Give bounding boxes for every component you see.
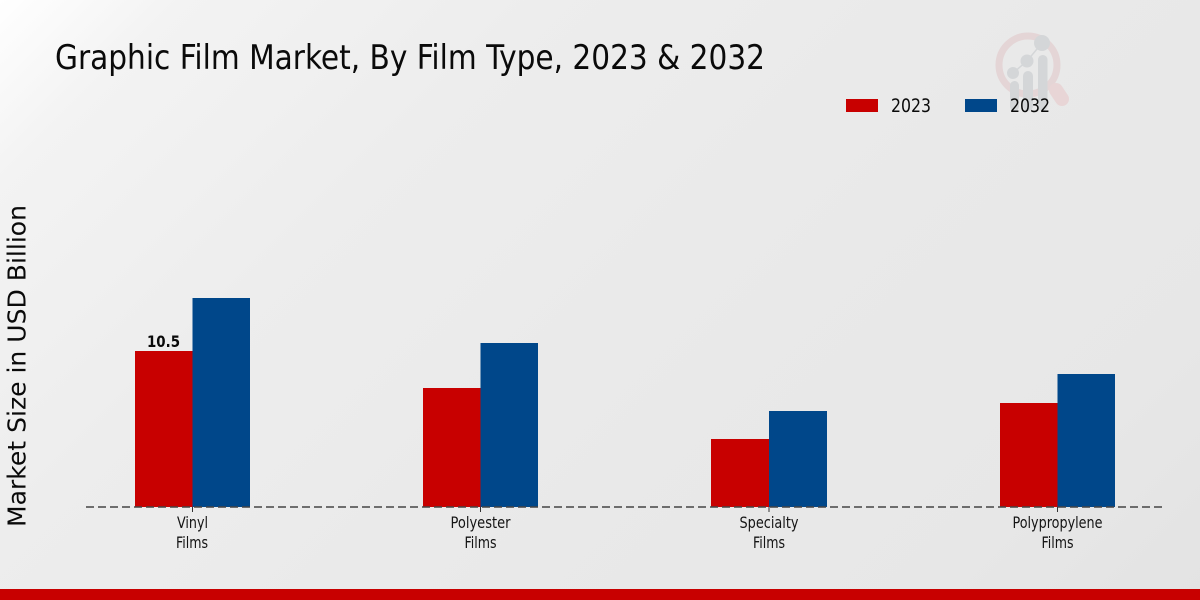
data label: 10.5: 10.5: [147, 332, 180, 351]
group: Vinyl Films: Films: [176, 533, 208, 552]
group: Polypropylene Films: [1000, 374, 1115, 552]
group: Polypropylene Films: Films: [1042, 533, 1074, 552]
group: Specialty Films: Films: [753, 533, 785, 552]
legend item: 2032: [965, 95, 1050, 117]
bottom bar: [0, 589, 1200, 600]
legend: [846, 95, 1050, 117]
group: Specialty Films: Specialty: [740, 513, 799, 532]
group: Polyester Films: [423, 343, 538, 552]
y axis label: Market Size in USD Billion: [2, 205, 32, 527]
group: Polyester Films: Films: [464, 533, 496, 552]
group: Polyester Films: Polyester: [450, 513, 511, 532]
group: Vinyl Films: Vinyl: [177, 513, 208, 532]
bar chart: [135, 298, 1115, 552]
watermark logo: [999, 35, 1062, 111]
legend item: 2023: [846, 95, 931, 117]
legend item: 2032: 2032: [1010, 95, 1050, 117]
group: Vinyl Films: [135, 298, 250, 552]
group: Specialty Films: [711, 411, 827, 552]
legend item: 2023: 2023: [891, 95, 931, 117]
group: Polypropylene Films: Polypropylene: [1012, 513, 1103, 532]
title: Graphic Film Market, By Film Type, 2023 & 2032: [55, 38, 765, 78]
